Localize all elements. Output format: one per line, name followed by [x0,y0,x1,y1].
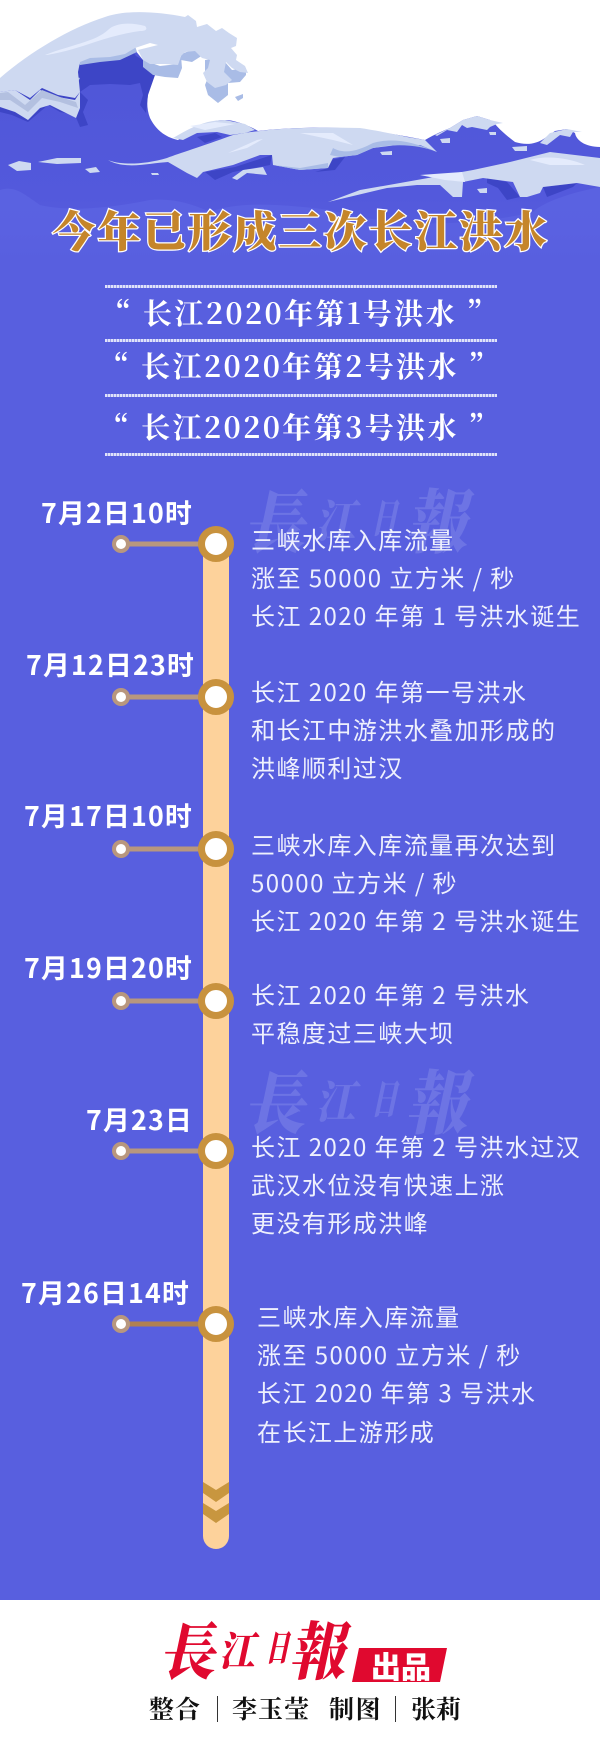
watermark: Changjiang Daily: 日 [368,488,406,545]
event text 3: 长江 2020 年第 2 号洪水诞生 [251,902,581,937]
watermark: Changjiang Daily: 報 [401,468,484,567]
watermark: Changjiang Daily [239,1049,484,1148]
flood name 1: “ 长江2020年第1号洪水 ” [102,292,498,333]
credits [149,1690,461,1726]
footer logo: Changjiang Daily: 報 [284,1603,360,1693]
footer logo: Changjiang Daily [154,1603,360,1693]
blue background panel [0,250,600,1600]
event text 5: 更没有形成洪峰 [251,1204,429,1239]
watermark: Changjiang Daily: 長 [239,1049,322,1148]
event text 6: 涨至 50000 立方米 / 秒 [257,1336,522,1371]
date: July 12: 7月12日23时 [26,644,195,683]
event text 2 [251,673,556,784]
credits: 整合 [149,1690,201,1726]
event text 1 [251,521,581,632]
credits: 李玉莹 [232,1690,310,1726]
event text 3: 50000 立方米 / 秒 [251,864,458,899]
event text 1: 涨至 50000 立方米 / 秒 [251,559,516,594]
event text 6 [257,1298,536,1448]
event text 4: 平稳度过三峡大坝 [251,1014,455,1049]
illustration: ocean waves [0,12,600,250]
icon: double chevron arrows [203,1482,229,1523]
title: 今年已形成三次长江洪水 [52,199,550,260]
timeline nodes [112,526,234,1342]
credits: 制图 [329,1690,382,1726]
date: July 26: 7月26日14时 [21,1272,190,1311]
event text 5: 长江 2020 年第 2 号洪水过汉 [251,1128,581,1163]
event text 4: 长江 2020 年第 2 号洪水 [251,976,530,1011]
event text 2: 洪峰顺利过汉 [251,749,404,784]
footer logo: Changjiang Daily: 日 [263,1620,297,1672]
event text 1: 三峡水库入库流量 [251,521,455,556]
event text 5 [251,1128,581,1239]
badge: produced by: 出品 [371,1643,431,1687]
footer logo: Changjiang Daily: 長 [154,1603,230,1693]
event text 5: 武汉水位没有快速上涨 [251,1166,506,1201]
event text 1: 长江 2020 年第 1 号洪水诞生 [251,597,581,632]
flood name 3: “ 长江2020年第3号洪水 ” [100,406,500,447]
watermark: Changjiang Daily: 江 [312,1068,366,1131]
watermark: Changjiang Daily: 長 [239,468,322,567]
timeline bar [203,544,229,1549]
date: July 19: 7月19日20时 [24,947,193,986]
credits: 张莉 [411,1690,461,1726]
date: July 17: 7月17日10时 [24,795,193,834]
event text 3: 三峡水库入库流量再次达到 [251,826,556,861]
watermark: Changjiang Daily: 報 [401,1049,484,1148]
event text 3 [251,826,581,937]
event text 6: 三峡水库入库流量 [257,1298,461,1333]
event text 6: 长江 2020 年第 3 号洪水 [257,1374,536,1409]
flood name 2: “ 长江2020年第2号洪水 ” [100,345,500,386]
date: July 2: 7月2日10时 [41,492,193,531]
event text 4 [251,976,530,1049]
event text 2: 长江 2020 年第一号洪水 [251,673,527,708]
event text 2: 和长江中游洪水叠加形成的 [251,711,556,746]
watermark: Changjiang Daily: 日 [368,1069,406,1126]
event text 6: 在长江上游形成 [257,1413,435,1448]
watermark: Changjiang Daily [239,468,484,567]
badge: produced by [352,1643,447,1687]
footer logo: Changjiang Daily: 江 [216,1621,264,1678]
watermark: Changjiang Daily: 江 [312,487,366,550]
date: July 23: 7月23日 [86,1099,193,1138]
